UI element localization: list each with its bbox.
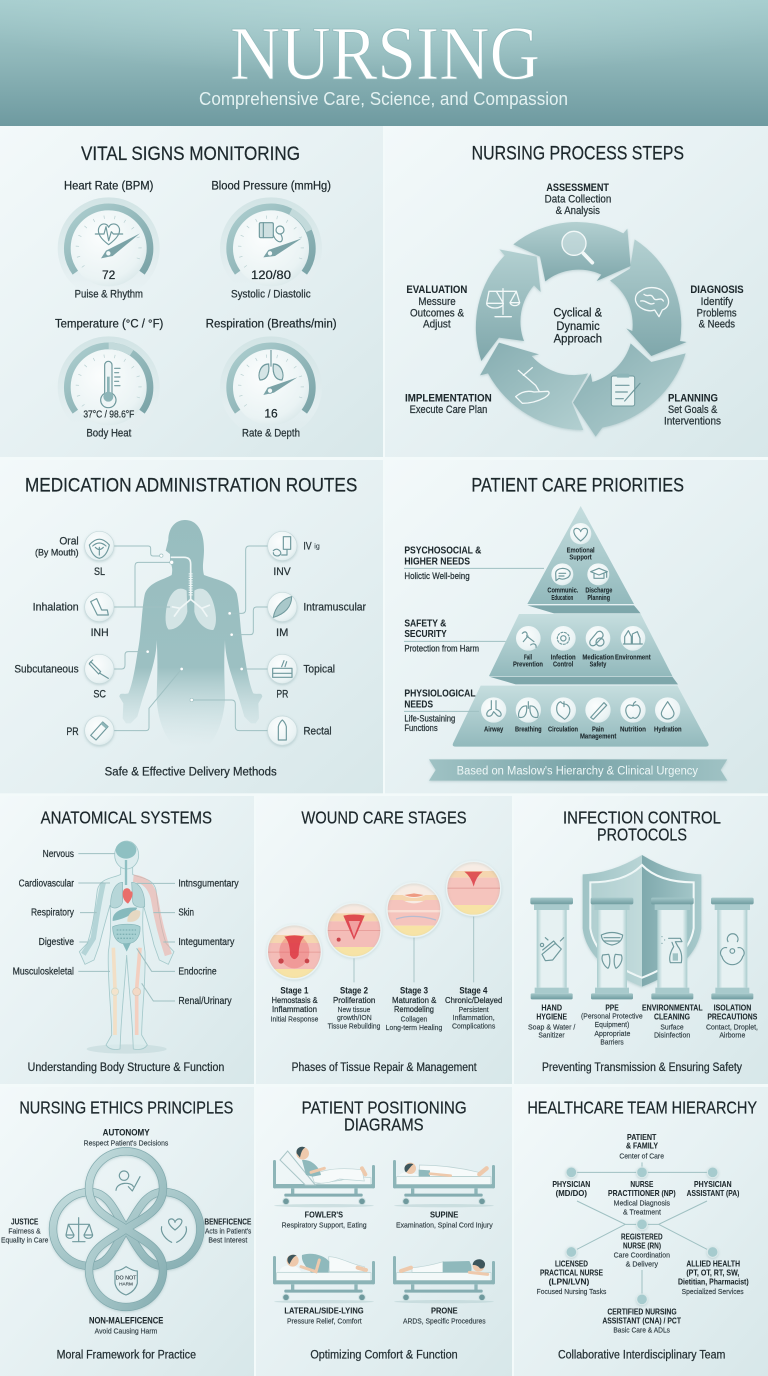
connector stems xyxy=(354,917,474,982)
shield xyxy=(583,855,701,987)
tier labels: Communic. xyxy=(547,588,578,595)
label: implementation: Execute Care Plan xyxy=(410,404,487,416)
route: rectal xyxy=(268,716,332,745)
panel: nursing ethics principles xyxy=(0,1087,254,1376)
labels: left: Digestive xyxy=(39,937,74,948)
role: certified nursing assistant: CERTIFIED NURSING xyxy=(607,1306,677,1316)
side label: physiological: NEEDS xyxy=(404,699,433,710)
route: subcutaneous xyxy=(14,654,114,701)
label: diagnosis: & Needs xyxy=(699,319,735,331)
role: allied health: ALLIED HEALTH xyxy=(686,1259,740,1269)
gauge: temperature: Body Heat xyxy=(86,428,131,440)
route: inhalation: INH xyxy=(91,627,109,639)
side label: physiological: Life-Sustaining xyxy=(404,714,455,724)
label: justice xyxy=(1,1216,48,1245)
label: evaluation xyxy=(406,284,467,331)
bed: supine: SUPINE xyxy=(430,1210,459,1220)
header banner xyxy=(0,0,768,126)
gauge: heart rate: 72 xyxy=(102,268,116,282)
labels: left: Respiratory xyxy=(31,908,74,919)
pillar: environmental cleaning: Surface xyxy=(660,1022,684,1031)
role: certified nursing assistant: ASSISTANT (CNA) / PCT xyxy=(602,1315,681,1325)
heading: PATIENT POSITIONING xyxy=(302,1097,467,1117)
stage 4 text: Chronic/Delayed xyxy=(445,995,503,1005)
gauge: blood pressure xyxy=(211,178,331,301)
label: evaluation: Adjust xyxy=(423,319,451,331)
heading: NURSING ETHICS PRINCIPLES xyxy=(19,1097,233,1117)
bed: prone: PRONE xyxy=(431,1306,458,1316)
label: justice: JUSTICE xyxy=(11,1216,39,1226)
icon: shield: HARM xyxy=(119,1281,133,1286)
tier labels: Hydration xyxy=(654,727,682,734)
airway xyxy=(171,557,210,617)
label: autonomy xyxy=(84,1128,168,1147)
pillar: PPE: Equipment) xyxy=(595,1020,630,1029)
tier labels: Control xyxy=(553,661,573,668)
role: licensed practical nurse: Focused Nursing Tasks xyxy=(537,1287,606,1296)
route: PR left: PR xyxy=(66,726,79,738)
bed: fowler's: FOWLER'S xyxy=(305,1210,343,1220)
role: allied health: (PT, OT, RT, SW, xyxy=(686,1268,739,1278)
gauge: respiration: 16 xyxy=(264,407,278,421)
gauge: heart rate xyxy=(58,178,160,301)
bed: lateral: Pressure Relief, Comfort xyxy=(287,1317,362,1326)
heading: DIAGRAMS xyxy=(344,1115,424,1135)
role: licensed practical nurse xyxy=(537,1259,606,1296)
side label: physiological xyxy=(404,688,479,733)
icon: justice scales xyxy=(66,1218,93,1242)
tier labels: Nutrition xyxy=(620,727,646,734)
gauge: blood pressure: 120/80 xyxy=(251,268,291,282)
route: PR left xyxy=(66,716,114,745)
footer caption: Preventing Transmission & Ensuring Safety xyxy=(542,1060,742,1074)
labels: right: Intnsgumentary xyxy=(178,878,239,889)
arrow: assessment xyxy=(513,222,631,281)
label: planning xyxy=(664,392,721,427)
label: implementation xyxy=(405,392,492,416)
heading: PATIENT CARE PRIORITIES xyxy=(471,476,684,497)
tier labels: Management xyxy=(580,734,617,741)
side label: psychosocial: HIGHER NEEDS xyxy=(404,556,470,567)
gauge: temperature: 37°C / 98.6°F xyxy=(83,409,134,420)
heading: WOUND CARE STAGES xyxy=(301,807,467,827)
gauge: blood pressure: Systolic / Diastolic xyxy=(231,289,311,301)
panel: wound care stages xyxy=(256,796,512,1084)
stage 3 text: Collagen xyxy=(401,1015,427,1024)
stage 4 text: Inflammation, xyxy=(453,1013,495,1022)
tier labels: Pain xyxy=(592,727,604,734)
wound: stage 3 xyxy=(387,883,441,938)
role: certified nursing assistant: Basic Care & ADLs xyxy=(613,1326,670,1335)
pillar: environmental cleaning: Disinfection xyxy=(654,1031,690,1040)
role: nurse practitioner xyxy=(608,1179,676,1216)
panel: patient positioning diagrams xyxy=(256,1087,512,1376)
pillar: hand hygiene: Soap & Water / xyxy=(528,1022,576,1031)
subtitle: Comprehensive Care, Science, and Compassion xyxy=(199,89,568,109)
side label: physiological: Functions xyxy=(404,723,438,733)
label: beneficence: BENEFICENCE xyxy=(204,1216,252,1226)
pillar: PPE xyxy=(581,898,643,1047)
label: assessment: Data Collection xyxy=(545,194,611,206)
bed: lateral: LATERAL/SIDE-LYING xyxy=(284,1306,364,1316)
icon: autonomy xyxy=(116,1171,140,1191)
pillar: PPE: Appropriate xyxy=(594,1029,630,1038)
gauge: respiration: Respiration (Breaths/min) xyxy=(206,317,337,331)
stage 3 text: Long-term Healing xyxy=(386,1023,442,1032)
side label: safety: SAFETY & xyxy=(404,618,446,629)
tier labels: Emotional xyxy=(567,547,595,554)
center label: Approach xyxy=(554,332,602,346)
center label: Cyclical & xyxy=(553,306,602,320)
stage 2 text: New tissue xyxy=(338,1005,370,1014)
footer caption: Understanding Body Structure & Function xyxy=(28,1060,224,1074)
tier labels: Breathing xyxy=(515,727,542,734)
route: inhalation: Inhalation xyxy=(33,602,79,614)
tier labels: Environment xyxy=(615,654,651,661)
nodes xyxy=(566,1167,718,1305)
role: physician: PHYSICIAN xyxy=(552,1179,590,1189)
tier: physiological xyxy=(453,686,709,747)
heading: INFECTION CONTROL xyxy=(563,807,721,827)
tier labels: Airway xyxy=(484,727,503,734)
pillar: hand hygiene: Sanitizer xyxy=(538,1031,565,1040)
route: intramuscular xyxy=(268,592,366,639)
tier labels: Prevention xyxy=(513,661,543,668)
stage 4 text: Persistent xyxy=(459,1005,489,1014)
role: patient and family: Center of Care xyxy=(619,1151,664,1160)
center label: Dynamic xyxy=(556,319,600,333)
icon: scales xyxy=(487,289,520,317)
label: diagnosis: Problems xyxy=(697,307,737,319)
heading: ANATOMICAL SYSTEMS xyxy=(41,807,212,827)
bed: fowler's: Respiratory Support, Eating xyxy=(282,1221,367,1230)
tier labels: Infection xyxy=(551,654,576,661)
bed: lateral xyxy=(273,1254,375,1326)
organs xyxy=(116,841,136,859)
role: nurse practitioner: & Treatment xyxy=(623,1207,662,1216)
label: beneficence xyxy=(204,1216,252,1245)
role: licensed practical nurse: PRACTICAL NURSE xyxy=(540,1268,603,1278)
stage 2 text: Proliferation xyxy=(333,995,376,1005)
icon: heart in hands xyxy=(161,1219,186,1242)
route: IV: ig xyxy=(314,544,320,551)
label: planning: Interventions xyxy=(664,415,721,427)
connector lines xyxy=(571,1162,713,1294)
heading: MEDICATION ADMINISTRATION ROUTES xyxy=(25,476,357,497)
label: diagnosis xyxy=(690,284,744,331)
stage 3 text xyxy=(386,985,442,1032)
stage 1 text: Inflammation xyxy=(272,1004,317,1014)
tier labels: Discharge xyxy=(585,588,612,595)
wound: stage 2 xyxy=(327,903,381,958)
stage 2 text: Tissue Rebuilding xyxy=(328,1022,380,1031)
pillar: isolation precautions: ISOLATION xyxy=(714,1003,751,1013)
tier icons: top xyxy=(551,523,609,585)
role: allied health: Specialized Services xyxy=(682,1287,744,1296)
icon: brain xyxy=(635,288,669,317)
labels: left: Musculoskeletal xyxy=(13,966,74,977)
label: justice: Equality in Care xyxy=(1,1236,48,1245)
tier labels: Education xyxy=(551,595,573,602)
label: evaluation: EVALUATION xyxy=(406,284,467,296)
side label: psychosocial xyxy=(404,545,544,581)
label: assessment xyxy=(545,182,611,217)
pillar: environmental cleaning: ENVIRONMENTAL xyxy=(642,1003,703,1013)
stage 2 text xyxy=(328,985,380,1031)
wound: stage 4 xyxy=(446,861,501,916)
route: topical: Topical xyxy=(303,664,335,676)
labels: right: Endocrine xyxy=(178,966,217,977)
role: licensed practical nurse: (LPN/LVN) xyxy=(549,1277,590,1287)
arrow: diagnosis xyxy=(610,239,687,356)
stage 1 text: Stage 1 xyxy=(280,985,308,995)
connector lines xyxy=(114,546,268,731)
labels: right: Renal/Urinary xyxy=(178,996,232,1007)
bed: prone xyxy=(393,1256,495,1326)
pillar: isolation precautions: Contact, Droplet, xyxy=(706,1022,758,1031)
label: beneficence: Best Interest xyxy=(208,1236,248,1245)
bed: prone: ARDS, Specific Procedures xyxy=(403,1317,486,1326)
panel: medication administration routes xyxy=(0,460,383,793)
label: diagnosis: DIAGNOSIS xyxy=(690,284,744,296)
side label: psychosocial: Holictic Well-being xyxy=(404,571,470,581)
tier labels: Medication xyxy=(582,654,614,661)
labels: right xyxy=(178,878,239,1007)
label: diagnosis: Identify xyxy=(701,296,733,308)
panel: infection control protocols xyxy=(514,796,768,1084)
route: oral: (By Mouth) xyxy=(35,548,79,558)
role: physician: (MD/DO) xyxy=(556,1188,587,1198)
pillar: isolation precautions xyxy=(706,898,758,1040)
route: subcutaneous: SC xyxy=(93,689,106,701)
label: assessment: ASSESSMENT xyxy=(546,182,609,194)
icon: clipboard xyxy=(611,374,640,406)
label: implementation: IMPLEMENTATION xyxy=(405,392,492,404)
pillar: hand hygiene: HYGIENE xyxy=(536,1012,567,1022)
label: planning: Set Goals & xyxy=(668,404,718,416)
panel: patient care priorities xyxy=(385,460,768,793)
bed: fowler's xyxy=(273,1147,375,1230)
leader lines xyxy=(78,854,175,1001)
label: beneficence: Acts in Patient's xyxy=(205,1227,251,1236)
tier labels: Planning xyxy=(587,595,610,602)
gauge: temperature xyxy=(55,317,163,440)
body silhouette xyxy=(119,520,262,747)
label: assessment: & Analysis xyxy=(556,205,600,217)
role: nurse practitioner: PRACTITIONER (NP) xyxy=(608,1188,676,1198)
label: autonomy: Respect Patient's Decisions xyxy=(84,1138,168,1147)
route: IV xyxy=(268,531,320,578)
heading: VITAL SIGNS MONITORING xyxy=(81,144,300,165)
role: certified nursing assistant xyxy=(602,1306,681,1335)
role: registered nurse: Care Coordination xyxy=(614,1251,670,1260)
role: physician xyxy=(552,1179,590,1198)
panel: anatomical systems xyxy=(0,796,254,1084)
pillar: hand hygiene: HAND xyxy=(541,1003,562,1013)
role: physician assistant: ASSISTANT (PA) xyxy=(687,1188,740,1198)
labels: left: Nervous xyxy=(43,849,74,860)
route: oral: Oral xyxy=(59,536,79,548)
icon: shield xyxy=(115,1267,137,1295)
side label: safety: SECURITY xyxy=(404,629,447,640)
stage 1 text xyxy=(271,985,318,1024)
labels: right: Skin xyxy=(178,908,194,919)
pillar: isolation precautions: Airborne xyxy=(719,1031,745,1040)
banner xyxy=(429,759,727,781)
role: nurse practitioner: NURSE xyxy=(630,1179,654,1189)
pillar: environmental cleaning: CLEANING xyxy=(654,1012,690,1022)
stage 3 text: Maturation & xyxy=(392,995,437,1005)
panel: nursing process steps xyxy=(385,126,768,457)
route: intramuscular: Intramuscular xyxy=(303,602,366,614)
arrow: implementation xyxy=(480,343,588,430)
label: evaluation: Outcomes & xyxy=(410,307,465,319)
label: non-maleficence xyxy=(89,1315,163,1335)
bed: supine: Examination, Spinal Cord Injury xyxy=(396,1221,493,1230)
footer caption: Phases of Tissue Repair & Management xyxy=(292,1060,477,1074)
wound: stage 1 xyxy=(267,924,322,980)
label: justice: Fairness & xyxy=(8,1227,41,1236)
labels: right: Integumentary xyxy=(178,937,234,948)
route: intramuscular: IM xyxy=(276,627,288,639)
arrow: planning xyxy=(573,343,686,437)
pillar: PPE: PPE xyxy=(605,1003,619,1013)
center label xyxy=(553,306,602,346)
gauge: heart rate: Heart Rate (BPM) xyxy=(64,178,153,192)
gauge: respiration xyxy=(206,317,337,440)
stage 4 text xyxy=(445,985,503,1031)
route: oral: SL xyxy=(94,566,105,578)
tier labels: Circulation xyxy=(548,727,578,734)
heading: PROTOCOLS xyxy=(597,825,687,845)
tier labels: Safety xyxy=(590,661,606,668)
role: patient and family xyxy=(619,1132,664,1160)
route: subcutaneous: Subcutaneous xyxy=(14,664,79,676)
gauge: respiration: Rate & Depth xyxy=(242,428,300,440)
icon: shield: DO NOT xyxy=(116,1276,137,1282)
label: non-maleficence: Avoid Causing Harm xyxy=(95,1326,157,1335)
title: NURSING xyxy=(230,12,540,96)
pillar: PPE: Barriers xyxy=(600,1038,624,1047)
labels: left: Cardiovascular xyxy=(19,878,75,889)
route: IV: INV xyxy=(273,566,291,578)
role: registered nurse: REGISTERED xyxy=(621,1231,663,1241)
gauge: temperature: Temperature (°C / °F) xyxy=(55,317,163,331)
stage 2 text: Stage 2 xyxy=(340,985,368,995)
stage 4 text: Stage 4 xyxy=(459,985,487,995)
icon: syringe and hand xyxy=(516,368,549,403)
icon: magnifier xyxy=(562,231,592,263)
bed: supine xyxy=(393,1160,495,1230)
role: registered nurse: & Delivery xyxy=(626,1259,658,1268)
stage 1 text: Initial Response xyxy=(271,1015,318,1024)
tier: safety xyxy=(489,614,672,676)
footer caption: Optimizing Comfort & Function xyxy=(310,1347,458,1361)
role: licensed practical nurse: LICENSED xyxy=(555,1259,588,1269)
pillar: PPE: (Personal Protective xyxy=(581,1012,643,1021)
footer caption: Collaborative Interdisciplinary Team xyxy=(558,1347,725,1361)
role: physician assistant xyxy=(687,1179,740,1198)
role: patient and family: PATIENT xyxy=(627,1132,656,1142)
side label: safety xyxy=(404,618,506,654)
body diagram xyxy=(79,841,174,1054)
stage 3 text: Remodeling xyxy=(394,1004,434,1014)
tier labels: Fall xyxy=(524,654,532,661)
label: non-maleficence: NON-MALEFICENCE xyxy=(89,1315,163,1325)
side label: safety: Protection from Harm xyxy=(404,644,479,654)
side label: physiological: PHYSIOLOGICAL xyxy=(404,688,476,699)
process ring xyxy=(476,222,687,437)
stage 3 text: Stage 3 xyxy=(400,985,428,995)
heading xyxy=(302,1097,467,1135)
role: nurse practitioner: Medical Diagnosis xyxy=(614,1198,670,1207)
route: rectal: Rectal xyxy=(303,725,332,737)
pillar: isolation precautions: PRECAUTIONS xyxy=(707,1012,758,1022)
route: topical xyxy=(268,654,335,701)
role: registered nurse: NURSE (RN) xyxy=(623,1240,661,1250)
role: registered nurse xyxy=(614,1231,670,1268)
route: topical: PR xyxy=(276,689,288,701)
stage 1 text: Hemostasis & xyxy=(272,995,318,1005)
pyramid xyxy=(453,506,709,747)
panel: healthcare team hierarchy xyxy=(514,1087,768,1376)
tier icons: middle xyxy=(516,626,645,651)
tier: psychosocial xyxy=(527,506,634,604)
arrow: evaluation xyxy=(476,249,541,361)
tier labels: Support xyxy=(569,554,592,561)
stage 4 text: Complications xyxy=(452,1022,495,1031)
role: allied health xyxy=(678,1259,749,1296)
heading xyxy=(563,807,721,845)
interlaced knot xyxy=(53,1151,200,1307)
role: physician assistant: PHYSICIAN xyxy=(694,1179,732,1189)
route: IV: IV xyxy=(303,540,312,552)
label: autonomy: AUTONOMY xyxy=(103,1128,150,1138)
gauge: blood pressure: Blood Pressure (mmHg) xyxy=(211,178,331,192)
heading: NURSING PROCESS STEPS xyxy=(472,143,684,164)
side label: psychosocial: PSYCHOSOCIAL & xyxy=(404,545,481,556)
tier icons: bottom xyxy=(481,697,680,723)
stage 2 text: growth/ION xyxy=(337,1013,372,1022)
label: planning: PLANNING xyxy=(668,392,718,404)
role: allied health: Dietitian, Pharmacist) xyxy=(678,1277,749,1287)
route: oral xyxy=(35,531,114,578)
bones xyxy=(113,948,115,1035)
footer caption: Safe & Effective Delivery Methods xyxy=(105,765,277,779)
banner: Based on Maslow's Hierarchy & Clinical Urgency xyxy=(457,763,698,777)
route: inhalation xyxy=(33,592,114,639)
tier labels xyxy=(484,547,682,741)
footer caption: Moral Framework for Practice xyxy=(57,1347,196,1361)
pillar: hand hygiene xyxy=(528,898,576,1040)
label: evaluation: Messure xyxy=(418,296,456,308)
lungs xyxy=(166,589,216,630)
pillar: environmental cleaning xyxy=(642,898,703,1040)
panel: vital signs monitoring xyxy=(0,126,383,457)
gauge: heart rate: Puise & Rhythm xyxy=(75,289,143,301)
labels: left xyxy=(13,849,75,977)
role: patient and family: & FAMILY xyxy=(626,1141,658,1151)
